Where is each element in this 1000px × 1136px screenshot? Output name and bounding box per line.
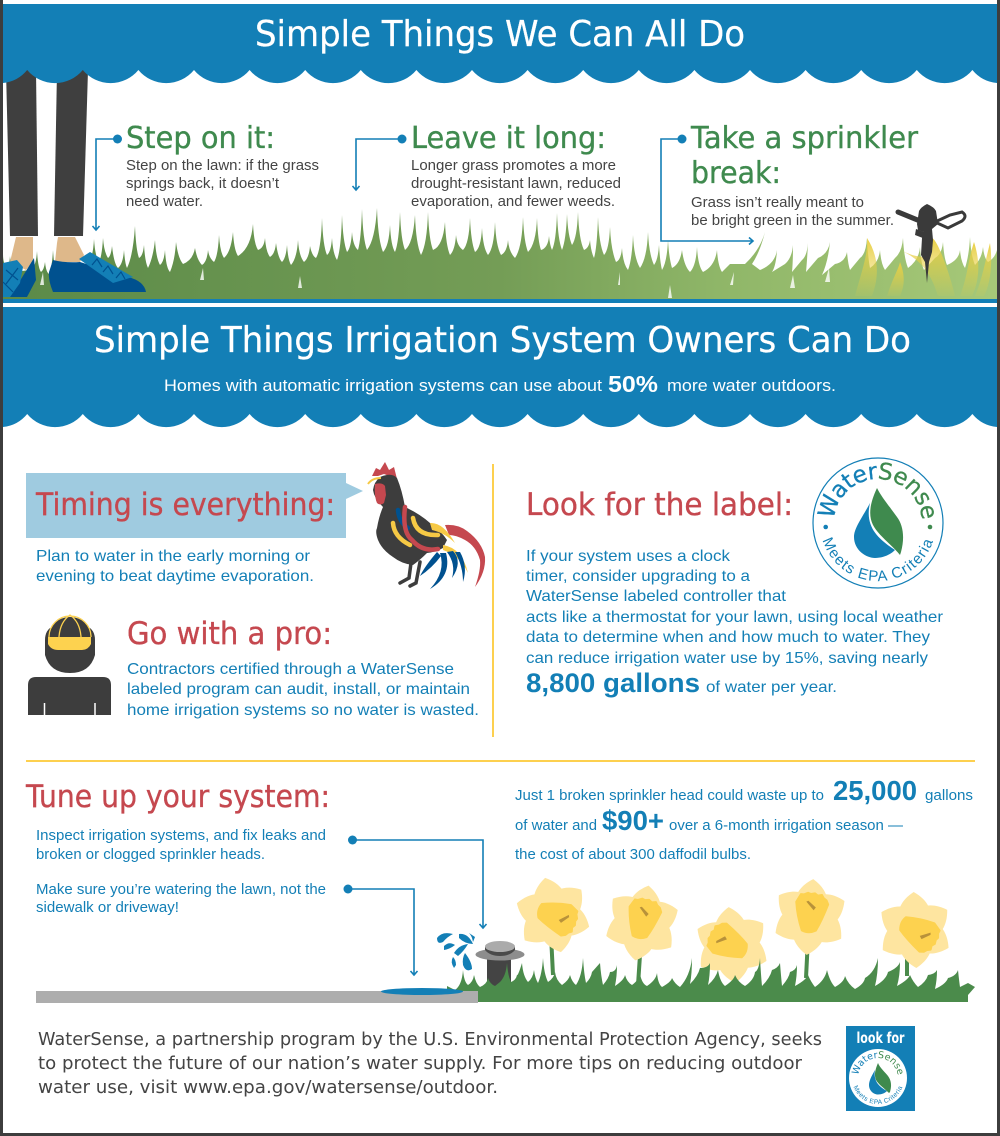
body text: Step on the lawn: if the grass: [126, 158, 319, 174]
lawn grass: [3, 208, 997, 299]
heading: Timing is everything:: [35, 487, 335, 523]
heading: Look for the label:: [526, 487, 793, 523]
illustration: feet and shoes: [3, 237, 146, 297]
body text: [526, 548, 944, 698]
heading: Leave it long:: [411, 121, 606, 156]
connector arrow: [92, 134, 122, 230]
connector arrow to sprinkler: [348, 836, 486, 928]
body text: Contractors certified through a WaterSense: [127, 661, 454, 678]
pop-up sprinkler head: [476, 941, 524, 990]
badge: look for WaterSense: WaterSense: [851, 1051, 902, 1074]
footer text: [38, 1029, 822, 1098]
connector arrow: [352, 134, 406, 190]
tip text: broken or clogged sprinkler heads.: [36, 847, 265, 863]
icon: WaterSense label: WaterSense: [816, 462, 934, 519]
statistic text: wasted water: Just 1 broken sprinkler head could waste up to: [515, 788, 824, 804]
banner: Simple Things We Can All Do: [3, 4, 997, 83]
tip: Take a sprinkler break: [661, 121, 919, 244]
icon: impact sprinkler: [898, 204, 965, 283]
badge: look for WaterSense: look for: [856, 1029, 905, 1047]
subtitle with 50% statistic: more water outdoors.: [667, 377, 836, 395]
body text: [126, 158, 319, 210]
icon: WaterSense label: [812, 457, 944, 589]
panel: go with a pro: [28, 615, 479, 719]
badge: look for WaterSense: [846, 1026, 915, 1111]
body text: Longer grass promotes a more: [411, 158, 616, 174]
badge: look for WaterSense: Meets EPA Criteria: [854, 1085, 902, 1104]
sidewalk: [36, 991, 478, 1003]
title: Simple Things We Can All Do: [255, 14, 745, 55]
body text: [691, 195, 894, 229]
statistic text: wasted water: gallons: [925, 788, 973, 804]
body text: data to determine when and how much to water. They: [526, 629, 930, 646]
banner: Simple Things Irrigation System Owners Can Do: [3, 307, 997, 427]
heading: [690, 121, 919, 191]
body text: [411, 158, 621, 210]
heading: Step on it:: [126, 121, 275, 156]
body text: evaporation, and fewer weeds.: [411, 194, 615, 210]
body text: need water.: [126, 194, 203, 210]
body text: [127, 661, 479, 719]
subtitle with 50% statistic: Homes with automatic irrigation systems can use about: [164, 377, 602, 395]
connector arrow to puddle: [344, 884, 418, 975]
daffodil stems: [551, 935, 907, 985]
body text: WaterSense labeled controller that: [526, 588, 787, 605]
body text: timer, consider upgrading to a: [526, 568, 750, 585]
yellowing grass: [855, 238, 991, 296]
heading: Take a sprinkler: [690, 121, 919, 156]
body text: home irrigation systems so no water is wasted.: [127, 702, 479, 719]
tip text: sidewalk or driveway!: [36, 900, 179, 916]
panel: timing is everything: [26, 473, 363, 585]
lower grass: [447, 958, 975, 1002]
tip: Step on it: [92, 121, 319, 230]
body text: can reduce irrigation water use by 15%, saving nearly: [526, 650, 928, 667]
statistic text: wasted water: the cost of about 300 daffodil bulbs.: [515, 847, 751, 863]
water splash: [437, 933, 475, 970]
statistic text: wasted water: [515, 775, 973, 863]
footer text: water use, visit www.epa.gov/watersense/outdoor.: [38, 1077, 498, 1098]
statistic text: wasted water: of water and: [515, 818, 597, 834]
body text: 8,800 gallons: [526, 668, 700, 698]
heading: Tune up your system:: [25, 779, 330, 815]
tip: Leave it long: [352, 121, 621, 210]
blue divider strip: [3, 299, 997, 303]
title: Simple Things Irrigation System Owners Can Do: [94, 320, 911, 361]
body text: labeled program can audit, install, or maintain: [127, 681, 470, 698]
body text: of water per year.: [706, 679, 837, 696]
connector arrow: [661, 134, 753, 244]
statistic text: wasted water: over a 6-month irrigation season —: [669, 818, 904, 834]
tip text: Make sure you’re watering the lawn, not the: [36, 882, 326, 898]
heading: Go with a pro:: [127, 616, 332, 652]
footer text: to protect the future of our nation’s water supply. For more tips on reducing outdoor: [38, 1053, 803, 1074]
subtitle with 50% statistic: [164, 371, 836, 397]
body text: Grass isn’t really meant to: [691, 195, 864, 211]
icon: WaterSense label: Meets EPA Criteria: [822, 537, 933, 582]
statistic text: wasted water: $90+: [602, 805, 664, 836]
callout: [26, 473, 363, 538]
body text: Plan to water in the early morning or: [36, 548, 311, 565]
statistic text: wasted water: 25,000: [833, 775, 917, 806]
body text: [36, 548, 314, 585]
illustration: legs and shoes: [6, 70, 88, 236]
panel: tune up your system: [25, 779, 487, 975]
body text: drought-resistant lawn, reduced: [411, 176, 621, 192]
tip text: [36, 828, 326, 916]
subtitle with 50% statistic: 50%: [608, 371, 658, 397]
heading: break:: [691, 156, 781, 191]
body text: be bright green in the summer.: [691, 213, 894, 229]
body text: If your system uses a clock: [526, 548, 731, 565]
icon: contractor with hard hat: [28, 615, 111, 715]
icon: rooster: [368, 462, 485, 589]
body text: springs back, it doesn’t: [126, 176, 279, 192]
water puddle: [381, 988, 463, 995]
body text: acts like a thermostat for your lawn, using local weather: [526, 609, 944, 626]
body text: evening to beat daytime evaporation.: [36, 568, 314, 585]
footer text: WaterSense, a partnership program by the U.S. Environmental Protection Agency, seeks: [38, 1029, 822, 1050]
tip text: Inspect irrigation systems, and fix leaks and: [36, 828, 326, 844]
daffodil flowers: [504, 864, 968, 998]
panel: look for the label: [526, 457, 944, 698]
